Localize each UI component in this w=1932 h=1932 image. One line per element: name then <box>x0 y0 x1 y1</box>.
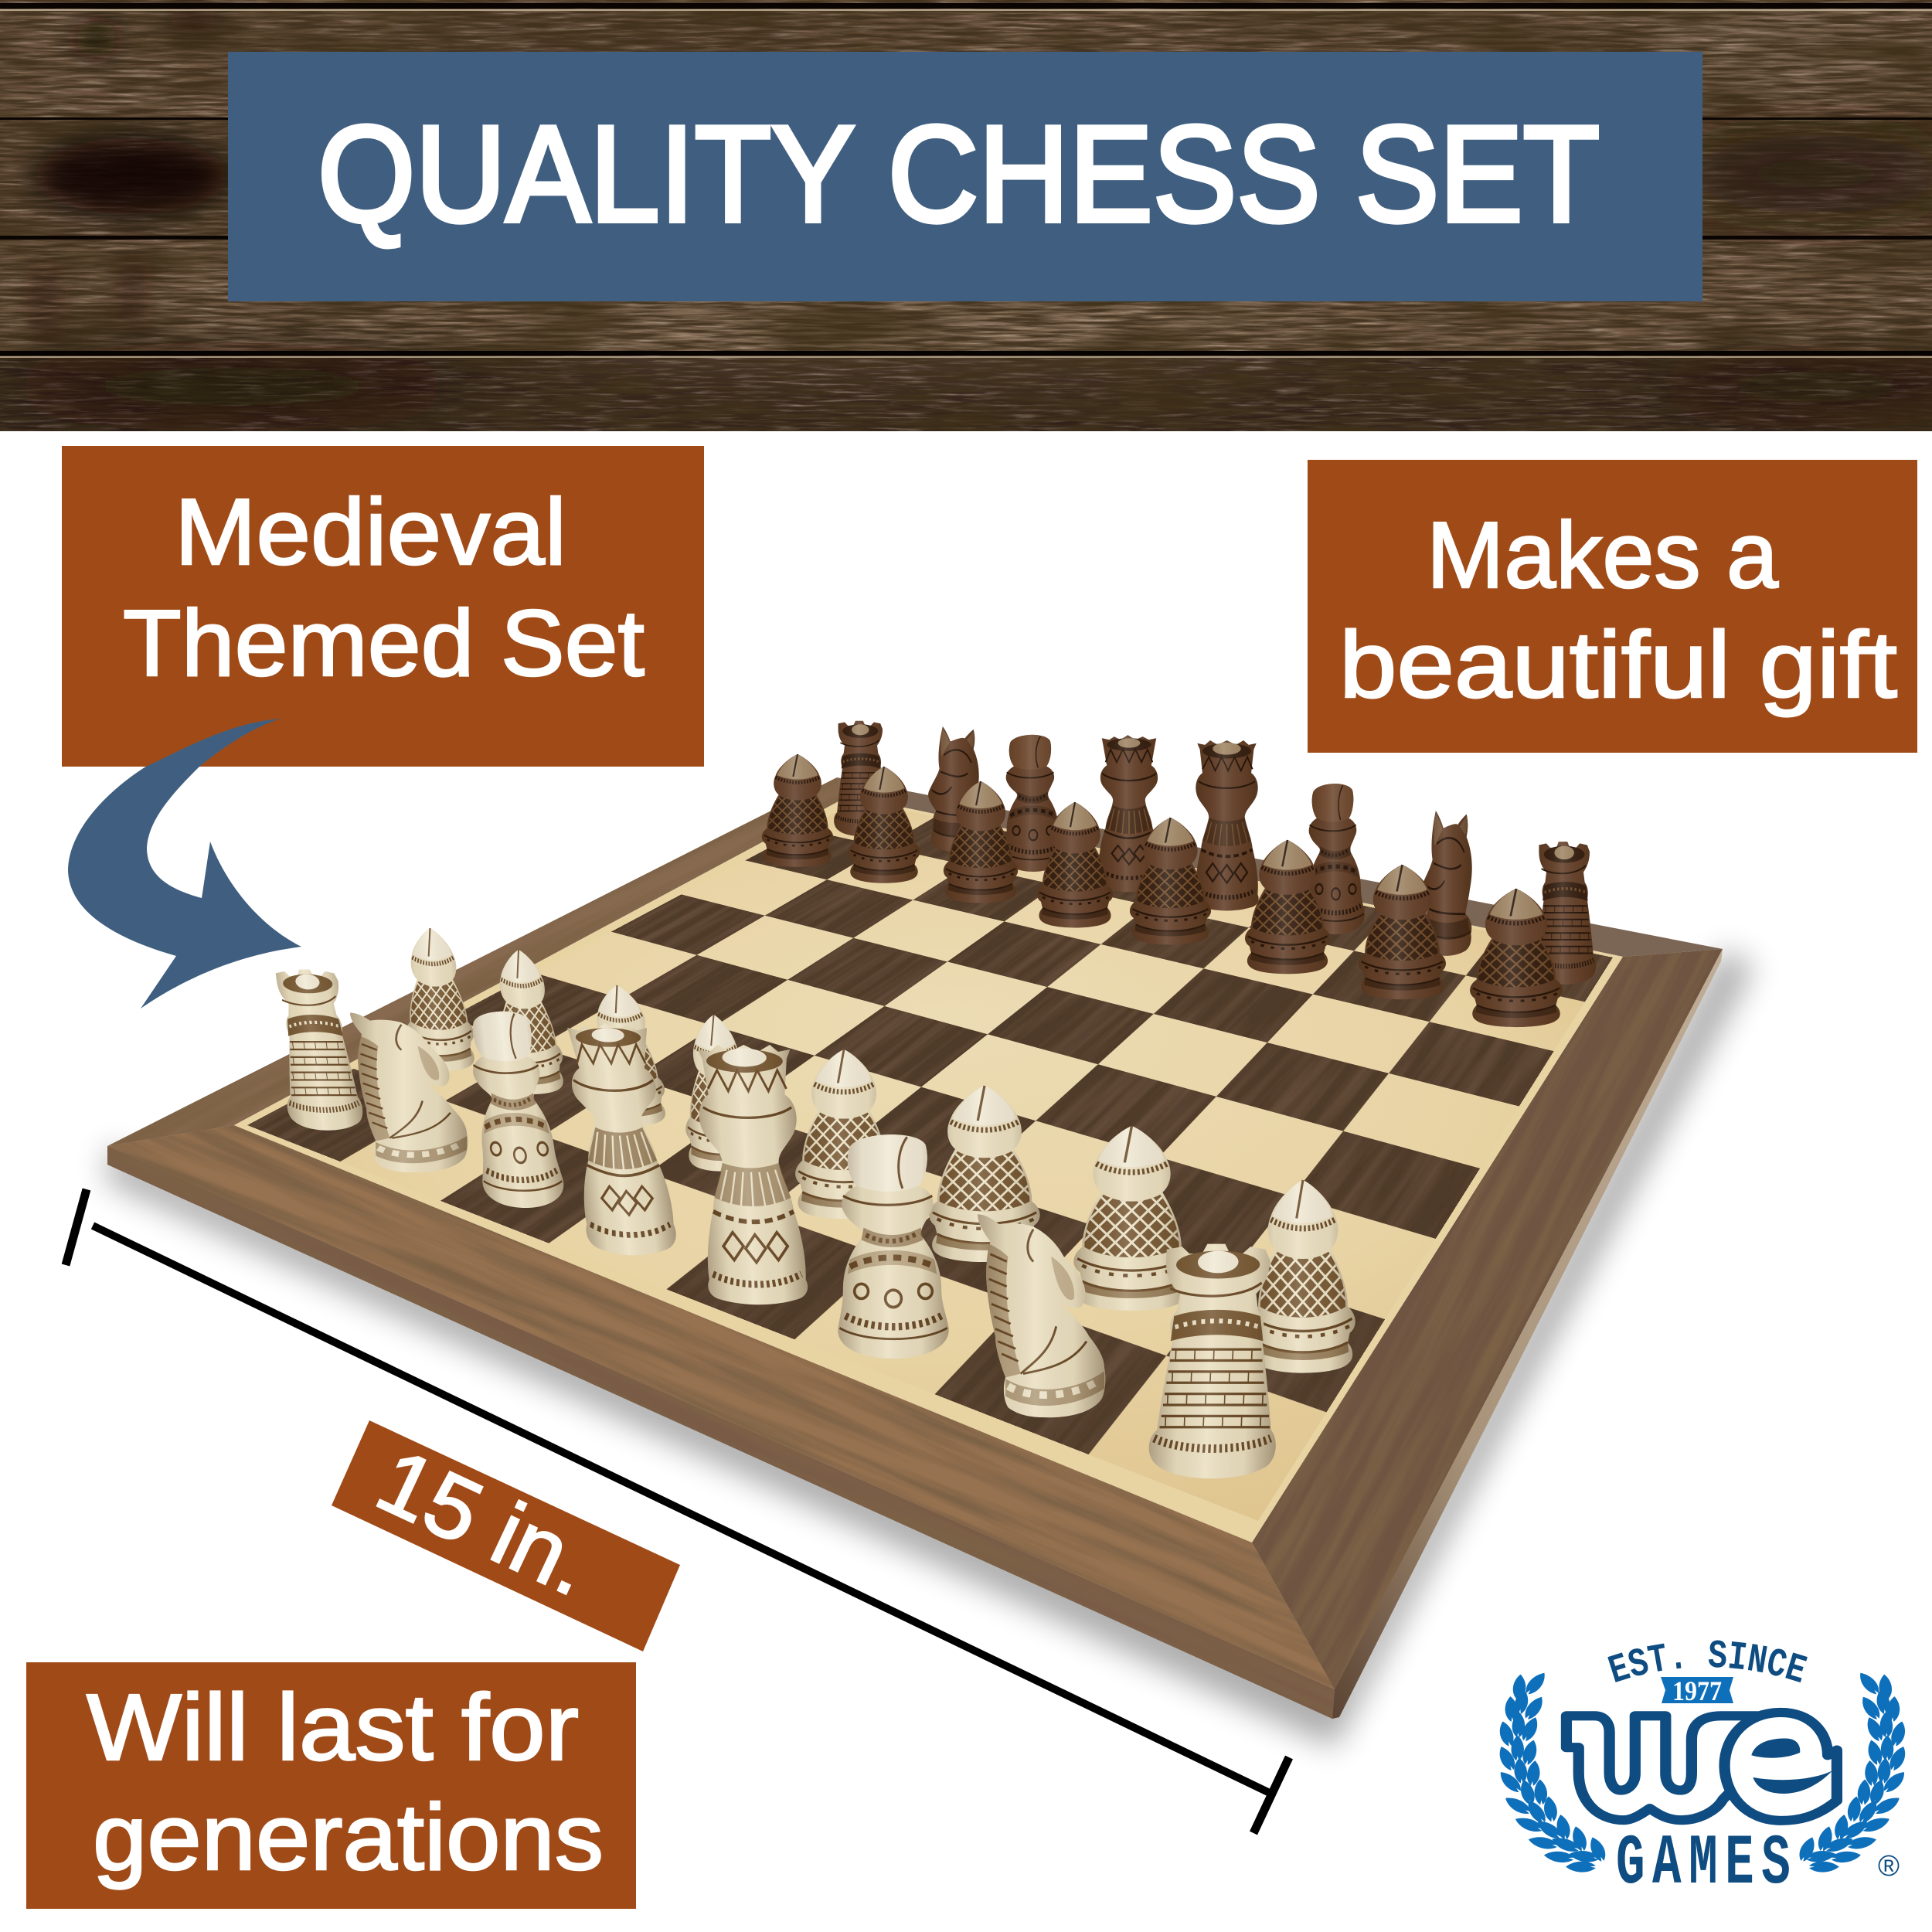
light chess pieces <box>270 928 1382 1478</box>
callout: medieval themed set: Medieval <box>175 479 566 584</box>
dark pawn <box>743 754 852 867</box>
callout: makes a beautiful gift: Makes a <box>1427 502 1778 607</box>
callout: makes a beautiful gift: beautiful gift <box>1339 612 1897 717</box>
light pawn <box>379 928 495 1071</box>
dark pawn <box>1109 818 1232 944</box>
dark pawn <box>830 767 938 883</box>
dark bishop <box>1004 735 1063 872</box>
dark pawn <box>1018 802 1132 927</box>
frame: front edge <box>21 1094 1458 1778</box>
light bishop <box>464 1012 566 1208</box>
dark rook <box>834 721 888 836</box>
logo arched text: EST. SINCE <box>1607 1640 1808 1683</box>
dark pawn <box>924 781 1037 903</box>
light knight <box>350 1013 468 1172</box>
light knight <box>978 1214 1105 1417</box>
frame: right rail <box>1252 949 1723 1689</box>
dark bishop <box>1307 784 1365 934</box>
frame: top-left rail <box>107 777 841 1146</box>
title text: QUALITY CHESS SET <box>318 97 1600 250</box>
light king <box>694 1045 809 1304</box>
light pawn <box>563 985 687 1126</box>
board shadow <box>107 949 1754 1748</box>
light pawn <box>901 1086 1068 1262</box>
wood plank header <box>0 0 1932 431</box>
logo laurel wreath <box>1495 1670 1910 1872</box>
dark rook <box>1534 842 1596 985</box>
dimension label: 15 in.: 15 in. <box>362 1430 607 1615</box>
dimension line <box>66 1189 1289 1833</box>
arrow pointing to chess pieces <box>68 719 301 1009</box>
logo registered mark: ® <box>1878 1850 1900 1883</box>
light rook <box>1148 1244 1284 1478</box>
light queen <box>562 1023 679 1255</box>
callout: will last for generations <box>26 1662 636 1909</box>
logo GAMES text: GAMES <box>1616 1824 1798 1904</box>
light pawn <box>1044 1126 1219 1311</box>
logo: WE Games <box>1499 1640 1906 1904</box>
light pawn <box>663 1015 773 1172</box>
frame: top-right rail <box>837 777 1723 957</box>
dark pawn <box>1223 840 1352 974</box>
logo WE wordmark <box>1566 1713 1837 1821</box>
dark chess pieces <box>743 721 1596 1027</box>
chessboard wood frame <box>107 777 1723 1719</box>
light pawn <box>468 950 583 1094</box>
callout: makes a beautiful gift <box>1308 460 1917 753</box>
frame: right edge strip <box>1332 949 1723 1719</box>
dimension label: 15 in. <box>332 1420 680 1651</box>
logo arched text <box>1607 1640 1808 1683</box>
title banner <box>228 52 1702 301</box>
logo year ribbon: 1977 <box>1672 1675 1722 1706</box>
dark pawn <box>1336 865 1468 999</box>
light rook <box>270 969 366 1131</box>
callout: medieval themed set <box>62 446 704 767</box>
dark king <box>1195 740 1259 910</box>
callout: medieval themed set: Themed Set <box>123 590 645 696</box>
callout: will last for generations: generations <box>93 1784 604 1889</box>
light pawn <box>1224 1180 1382 1373</box>
light bishop <box>838 1134 949 1359</box>
light pawn <box>770 1049 917 1219</box>
dark pawn <box>1447 889 1586 1027</box>
dark queen <box>1098 735 1160 892</box>
callout: will last for generations: Will last for <box>87 1675 579 1780</box>
maple inlay border <box>234 796 1623 1543</box>
frame: front-left rail <box>107 1125 1335 1689</box>
dark knight <box>928 726 979 852</box>
dark knight <box>1421 811 1472 956</box>
